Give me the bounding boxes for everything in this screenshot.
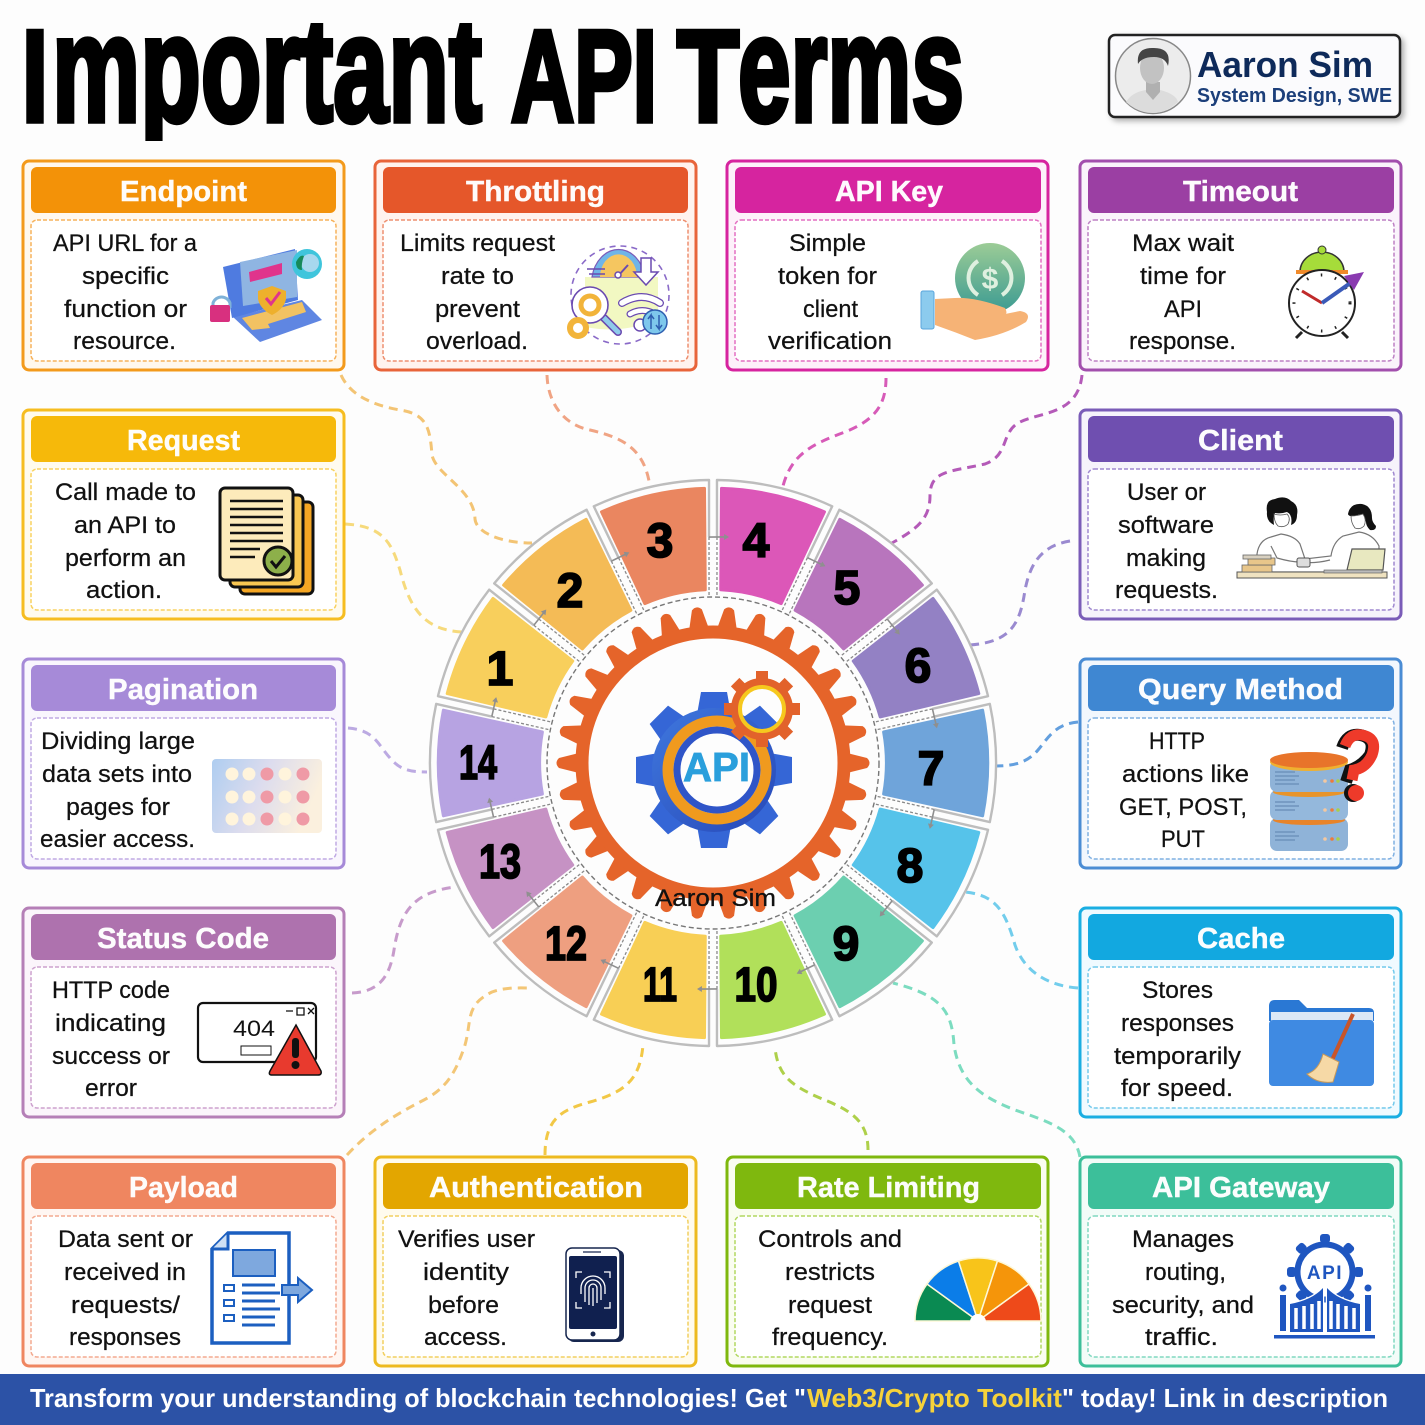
heading xyxy=(1088,914,1394,960)
description xyxy=(735,220,1041,361)
description: rate to xyxy=(441,263,514,290)
connector: Timeout to segment 5 xyxy=(892,375,1082,543)
description: overload. xyxy=(426,328,528,355)
connector: Endpoint to segment 2 xyxy=(341,375,532,543)
description: before xyxy=(428,1292,499,1319)
segment 11: 11 xyxy=(643,959,677,1012)
description: verification xyxy=(768,328,892,355)
heading xyxy=(1088,167,1394,213)
description: specific xyxy=(82,263,169,290)
description: responses xyxy=(69,1324,181,1351)
description: error xyxy=(85,1075,137,1102)
segment 2: 2 xyxy=(557,565,583,618)
connector: Client to segment 6 xyxy=(970,541,1070,645)
heading xyxy=(383,167,688,213)
panel: API Gateway xyxy=(1080,1157,1401,1366)
description: API URL for a xyxy=(53,230,198,257)
heading xyxy=(31,914,336,960)
segment 3: 3 xyxy=(647,515,673,568)
segment 9: 9 xyxy=(833,918,859,971)
description xyxy=(383,1216,688,1357)
panel: Request xyxy=(23,410,344,619)
segment 6: 6 xyxy=(905,640,931,693)
icon: 404 error window xyxy=(198,1003,321,1075)
segment 8: 8 xyxy=(897,840,923,893)
connector: API Gateway to segment 9 xyxy=(893,983,1080,1157)
heading xyxy=(1088,665,1394,711)
description: requests/ xyxy=(71,1292,180,1319)
icon: phone with fingerprint xyxy=(566,1248,624,1342)
description: restricts xyxy=(785,1259,875,1286)
description xyxy=(735,1216,1041,1357)
connector: Throttling to segment 3 xyxy=(547,375,650,487)
description: routing, xyxy=(1145,1259,1226,1286)
description: requests. xyxy=(1115,577,1218,604)
description xyxy=(31,220,336,361)
heading xyxy=(31,167,336,213)
segment 9 xyxy=(778,863,926,1011)
icon: coin in hand xyxy=(921,243,1028,340)
description: Simple xyxy=(789,230,866,257)
panel: Client xyxy=(1080,410,1401,619)
title xyxy=(26,23,962,141)
connector: Request to segment 1 xyxy=(345,524,462,632)
title: T xyxy=(677,3,739,149)
connector: Status Code to segment 13 xyxy=(352,887,455,993)
heading: API Gateway xyxy=(1152,1172,1330,1204)
segment 4 xyxy=(699,483,826,608)
heading: Query Method xyxy=(1138,674,1343,706)
panel: Timeout xyxy=(1080,161,1401,370)
segment 12: 12 xyxy=(545,918,587,971)
heading xyxy=(383,1163,688,1209)
segment 14 xyxy=(438,710,542,816)
segment 7 xyxy=(884,710,988,816)
icon: author portrait xyxy=(1116,38,1190,114)
heading xyxy=(1088,1163,1394,1209)
description: User or xyxy=(1127,479,1206,506)
description: resource. xyxy=(73,328,176,355)
description: success or xyxy=(52,1043,170,1070)
description: API xyxy=(1164,296,1202,323)
description xyxy=(1088,967,1394,1108)
icon: coin in hand: $ xyxy=(982,263,999,296)
connector: Payload to segment 12 xyxy=(347,988,532,1155)
heading: Pagination xyxy=(108,674,258,706)
icon: laptop xyxy=(210,249,322,342)
title: API xyxy=(511,3,657,149)
description: actions like xyxy=(1122,761,1249,788)
description: request xyxy=(788,1292,872,1319)
icon: speed gauge xyxy=(915,1258,1041,1330)
description: temporarily xyxy=(1114,1043,1241,1070)
description: easier access. xyxy=(40,826,195,853)
icon: documents with check xyxy=(220,488,313,594)
panel: Endpoint xyxy=(23,161,344,370)
description: making xyxy=(1126,545,1206,572)
description xyxy=(1088,469,1394,610)
description: Verifies user xyxy=(398,1226,535,1253)
description: function or xyxy=(64,296,187,323)
segment 4: 4 xyxy=(743,515,770,568)
heading: Payload xyxy=(129,1172,238,1204)
segment 2 xyxy=(500,515,648,663)
panel: Status Code xyxy=(23,908,344,1117)
description: token for xyxy=(778,263,877,290)
footer banner: " today! Link in description xyxy=(1062,1383,1388,1413)
description: an API to xyxy=(74,512,176,539)
description: action. xyxy=(86,577,162,604)
description: HTTP code xyxy=(52,977,170,1004)
panel: Throttling xyxy=(375,161,696,370)
author role: System Design, SWE xyxy=(1197,85,1392,107)
heading: Timeout xyxy=(1183,176,1298,208)
heading xyxy=(735,1163,1041,1209)
heading xyxy=(31,665,336,711)
segment 7: 7 xyxy=(918,743,944,796)
author badge xyxy=(1109,35,1400,117)
description: Dividing large xyxy=(41,728,195,755)
description: response. xyxy=(1129,328,1236,355)
icon: database servers with question mark xyxy=(1270,735,1374,851)
heading xyxy=(31,1163,336,1209)
heading: Client xyxy=(1198,425,1283,457)
heading xyxy=(31,416,336,462)
heading xyxy=(1088,416,1394,462)
heading: Cache xyxy=(1197,923,1285,955)
description: Data sent or xyxy=(58,1226,193,1253)
connector: Pagination to segment 14 xyxy=(348,728,427,772)
panel: Pagination xyxy=(23,659,344,868)
icon: throttling gauge xyxy=(570,246,669,344)
panel: Cache xyxy=(1080,908,1401,1117)
description: received in xyxy=(64,1259,186,1286)
heading: Rate Limiting xyxy=(797,1172,980,1204)
orange gear ring xyxy=(556,606,870,920)
heading: Endpoint xyxy=(120,176,247,208)
description: Controls and xyxy=(758,1226,902,1253)
segment 3 xyxy=(600,483,727,608)
ring watermark: Aaron Sim xyxy=(655,885,776,912)
heading: Request xyxy=(127,425,240,457)
icon: gateway gear and gate xyxy=(1274,1234,1375,1338)
panel: Query Method xyxy=(1080,659,1401,868)
segment 10 xyxy=(699,918,826,1043)
segment 5 xyxy=(778,515,926,663)
panel: Authentication xyxy=(375,1157,696,1366)
segment 12 xyxy=(500,863,648,1011)
description: PUT xyxy=(1161,826,1205,853)
segment 8 xyxy=(844,789,983,930)
heading: Authentication xyxy=(429,1172,643,1204)
footer banner: Web3/Crypto Toolkit xyxy=(807,1383,1062,1413)
description xyxy=(31,469,336,610)
description: Max wait xyxy=(1132,230,1234,257)
icon: 404 error window: 404 xyxy=(233,1016,275,1041)
author name: Aaron Sim xyxy=(1197,44,1373,85)
panel: API Key xyxy=(727,161,1048,370)
description: perform an xyxy=(65,545,186,572)
description: access. xyxy=(424,1324,507,1351)
title: I xyxy=(22,3,48,149)
segment 14: 14 xyxy=(459,737,497,790)
segment 5: 5 xyxy=(834,562,860,615)
description: GET, POST, xyxy=(1119,794,1247,821)
description: responses xyxy=(1121,1010,1234,1037)
description: data sets into xyxy=(42,761,192,788)
description xyxy=(383,220,688,361)
heading: Status Code xyxy=(97,923,269,955)
footer banner xyxy=(0,1374,1425,1425)
description: Stores xyxy=(1142,977,1213,1004)
description xyxy=(31,718,336,859)
icon: folder with broom xyxy=(1269,1000,1374,1086)
panel: Rate Limiting xyxy=(727,1157,1048,1366)
description xyxy=(31,1216,336,1357)
description: HTTP xyxy=(1149,728,1205,755)
icon: document with arrow xyxy=(212,1233,312,1343)
heading xyxy=(735,167,1041,213)
footer banner: Transform your understanding of blockchain technologies! Get " xyxy=(30,1383,806,1413)
segment 1 xyxy=(443,596,582,737)
panel: Payload xyxy=(23,1157,344,1366)
connector: Authentication to segment 11 xyxy=(545,1045,643,1155)
icon: two people at desk xyxy=(1237,497,1387,578)
connector: Cache to segment 8 xyxy=(965,892,1078,988)
description: pages for xyxy=(66,794,170,821)
connector: Rate Limiting to segment 10 xyxy=(775,1048,868,1150)
segment 1: 1 xyxy=(487,643,513,696)
description: Call made to xyxy=(55,479,196,506)
description: identity xyxy=(423,1259,509,1286)
segment 10: 10 xyxy=(734,959,778,1012)
description: time for xyxy=(1140,263,1226,290)
description: indicating xyxy=(55,1010,166,1037)
arrows between segments xyxy=(485,533,941,993)
connector: Query Method to segment 7 xyxy=(996,722,1078,766)
description: Manages xyxy=(1132,1226,1234,1253)
description: software xyxy=(1118,512,1214,539)
segment 11 xyxy=(600,918,727,1043)
segment frames and dashed guides xyxy=(430,474,996,1052)
connector: API Key to segment 4 xyxy=(782,378,886,490)
segment 6 xyxy=(844,596,983,737)
heading: API Key xyxy=(835,176,943,208)
description xyxy=(1088,1216,1394,1357)
heading: Throttling xyxy=(466,176,605,208)
segment 13: 13 xyxy=(479,836,521,889)
description: traffic. xyxy=(1145,1324,1218,1351)
segment 13 xyxy=(443,789,582,930)
description xyxy=(1088,718,1394,859)
icon: alarm clock xyxy=(1289,246,1364,338)
icon: gateway gear and gate: API xyxy=(1307,1263,1343,1284)
description xyxy=(1088,220,1394,361)
description: for speed. xyxy=(1121,1075,1233,1102)
description: Limits request xyxy=(400,230,555,257)
central ring diagram xyxy=(430,474,996,1052)
icon: API gear logo: API xyxy=(683,744,750,790)
description xyxy=(31,967,336,1108)
description: frequency. xyxy=(772,1324,888,1351)
description: prevent xyxy=(435,296,520,323)
icon: pagination dot grid xyxy=(212,759,322,833)
description: security, and xyxy=(1112,1292,1254,1319)
description: client xyxy=(803,296,858,323)
icon: API gear logo xyxy=(636,671,800,848)
